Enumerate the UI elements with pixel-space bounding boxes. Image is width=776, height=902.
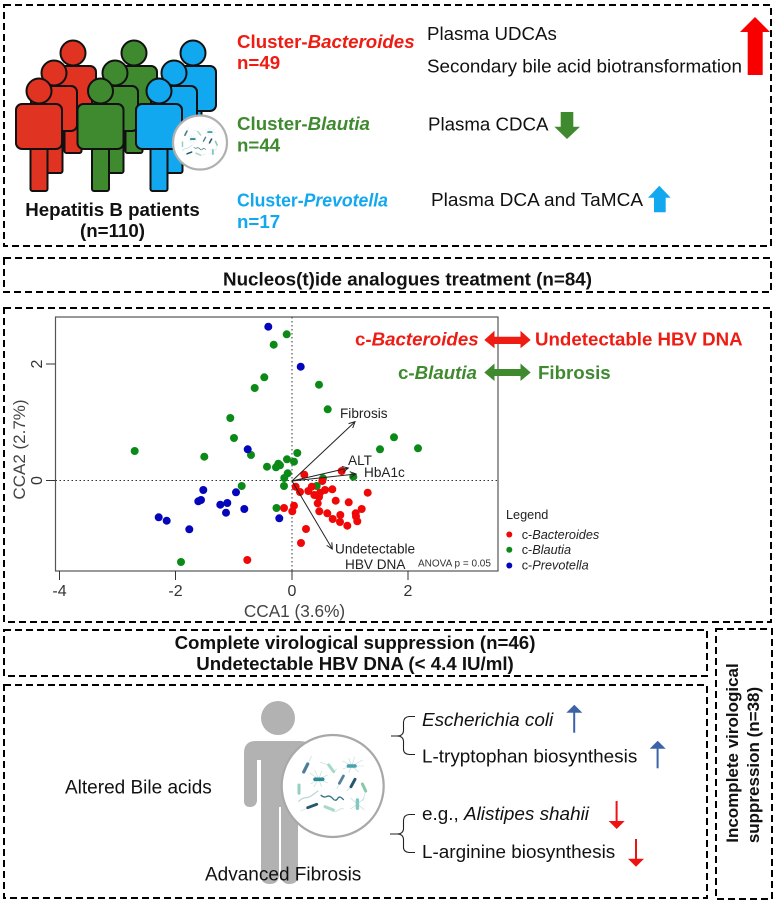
label: n=110: (n=110) [80,220,145,241]
callout: c-Bacteroides association: c-Bacteroides [355,328,479,350]
panel: advanced fibrosis findings [4,685,707,898]
biplot vectors [292,422,356,549]
vertical heading: suppression (n=38) [744,687,763,843]
heading line 1: Complete virological suppression (n=46) [175,632,535,653]
data points: c-Prevotella [155,323,305,533]
callout: c-Blautia association: Fibrosis [538,362,611,383]
heading: treatment: Nucleos(t)ide analogues treatment (n=84) [223,268,592,290]
label: Cluster-Prevotella [237,190,388,232]
legend [506,508,600,572]
icon: blue up arrow [648,186,671,212]
vertical heading: Incomplete virological [723,663,742,843]
heading line 2: Undetectable HBV DNA (< 4.4 IU/ml) [196,653,514,674]
label: Cluster-Bacteroides: n=49 [237,52,280,73]
ANOVA note: ANOVA p = 0.05 [418,558,491,570]
callout: c-Bacteroides association: Undetectable HBV DNA [535,328,743,350]
label: Cluster-Blautia: Cluster-Blautia [237,113,370,134]
label: Hepatitis B patients: Hepatitis B patients [25,199,200,220]
biplot labels: HBV DNA [345,557,406,572]
data points: c-Bacteroides [243,467,372,564]
icon: red patients [16,40,96,191]
legend: Legend [506,508,548,522]
text: secondary bile acid: Secondary bile acid biotransformation [427,56,742,76]
panel: complete virological suppression [4,630,707,676]
callout: c-Blautia association: c-Blautia [398,362,477,383]
legend: c-Prevotella [522,558,589,572]
icon: green down arrow [554,112,580,139]
icon: blue arrow 1 [566,705,582,733]
icon: red arrow 2 [628,839,644,867]
bracket upper [391,716,415,754]
label: Cluster-Prevotella: Cluster-Prevotella [237,190,388,210]
axis tick labels [29,359,413,600]
chart: CCA scatter plot [10,317,498,621]
panel: treatment banner [4,258,771,292]
text: plasma DCA and TaMCA: Plasma DCA and TaMCA [431,189,644,210]
text: plasma CDCA: Plasma CDCA [428,114,549,134]
panel: incomplete virological suppression [716,629,772,899]
axis tick labels: 0 [288,583,297,600]
axis title: CCA1: CCA1 (3.6%) [244,601,345,621]
biplot labels [335,406,415,572]
text: Escherichia coli: Escherichia coli [422,710,554,731]
panel: patient clusters [4,5,771,246]
icon: microbiome circle small [173,116,227,170]
label: Cluster-Bacteroides: Cluster-Bacteroides [237,31,415,52]
vertical heading [723,663,763,843]
axis tick labels: 0 [29,476,46,485]
icon: grey person with microbiome [244,701,384,884]
bracket lower [390,814,415,852]
panel: CCA ordination [4,308,771,622]
data points: c-Blautia [131,330,422,566]
text: plasma UDCAs: Plasma UDCAs [427,23,557,44]
icon: big red up arrow [740,17,770,75]
icon: blue patients [136,40,216,191]
text: Alistipes shahii: e.g., Alistipes shahii [422,804,590,825]
legend: c-Blautia [522,543,571,557]
axis tick labels: -2 [168,583,183,600]
axis tick labels: 2 [404,583,413,600]
icon: blue arrow 2 [650,741,666,768]
label: Cluster-Blautia: n=44 [237,134,281,156]
label: Cluster-Prevotella: n=17 [237,211,280,232]
biplot labels: Fibrosis [340,406,388,421]
text: altered bile acids: Altered Bile acids [65,778,212,798]
text: L-arginine biosynthesis: L-arginine biosynthesis [422,842,615,863]
label: Cluster-Blautia [237,113,370,156]
axis tick labels: -4 [52,583,67,600]
axis tick labels: 2 [29,359,46,368]
axis title: CCA2: CCA2 (2.7%) [10,399,29,500]
biplot labels: ALT [348,453,372,468]
legend: c-Bacteroides [522,528,600,542]
icon: red arrow 1 [609,801,625,829]
biplot labels: Undetectable [335,542,415,556]
text: L-tryptophan biosynthesis: L-tryptophan biosynthesis [422,747,637,768]
icon: green patients [78,40,157,191]
label: Cluster-Bacteroides [237,31,415,73]
callout: c-Bacteroides association [355,328,743,350]
callout: c-Blautia association [398,362,611,383]
biplot labels: HbA1c [364,465,405,480]
text: advanced fibrosis: Advanced Fibrosis [205,864,361,886]
